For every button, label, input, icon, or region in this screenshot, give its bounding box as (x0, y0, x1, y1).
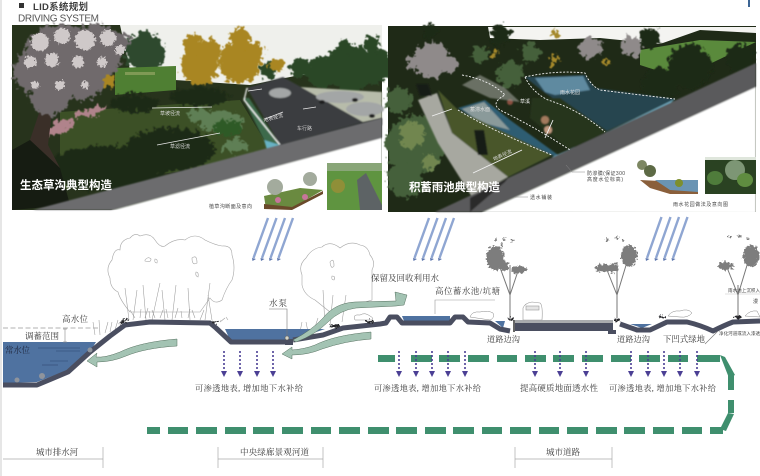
label: water levels: 常水位 (5, 345, 30, 355)
icon: rain garden section thumbnail (637, 160, 698, 194)
panel label: pond: 积蓄雨池典型构造 (409, 180, 500, 194)
label: sunken green: 下凹式绿地 (663, 334, 706, 344)
label: water levels (3, 314, 100, 355)
leader notes: pond: 高度水位标高) (587, 176, 623, 183)
illustration: channel water (225, 329, 325, 340)
leader notes: pond: 雨水花园做法及意向图 (673, 201, 728, 208)
label: permeable surface 2: 可渗透地表, 增加地下水补给 (374, 383, 481, 393)
chart: infiltration arrows (224, 351, 697, 372)
icon: street tree 1 (486, 238, 527, 318)
label: small right-edge notes: 雨水地上沉积入 (728, 287, 760, 294)
label: pump: 水泵 (269, 298, 287, 308)
bracket: urban drainage river (3, 447, 103, 468)
bracket: urban road (515, 447, 612, 468)
label: small right-edge notes: 净化河道或流入漆透 (719, 330, 760, 337)
bracket: central green corridor: 中央绿廊景观河道 (240, 447, 309, 457)
arrow: runoff to channel (282, 332, 371, 359)
leader notes: pond (515, 165, 728, 208)
bracket: urban drainage river: 城市排水河 (36, 447, 79, 457)
illustration: outline trees (108, 234, 374, 312)
illustration: water ripple lines (38, 348, 80, 365)
panel: rain retention pond (385, 24, 756, 213)
icon: street tree 2 (595, 236, 637, 318)
label: permeable surface 3: 可渗透地表, 增加地下水补给 (609, 383, 716, 393)
label: road ditch right: 道路边沟 (617, 334, 650, 344)
leader notes: pond: 透水铺装 (530, 194, 552, 201)
bracket: urban road: 城市道路 (546, 447, 580, 457)
title: DRIVING SYSTEM (18, 14, 99, 24)
panel: ecological grass swale: 地表径流 (263, 112, 284, 124)
caption: swale section: 植草沟断面及意向 (209, 203, 252, 210)
illustration: pond water (402, 316, 450, 321)
label: retention and reuse: 保留及回收利用水 (371, 273, 439, 283)
arrow: pumped water to high pond (293, 292, 407, 342)
panel: rain retention pond: 雨水花园 (560, 89, 580, 96)
label: small right-edge notes: 漫 (753, 298, 758, 305)
illustration: shrubs (354, 310, 760, 320)
icon: rain garden photo (705, 157, 756, 194)
panel: cross section (3, 217, 760, 468)
panel: rain retention pond: 地表径流 (492, 148, 513, 163)
label: pump (269, 298, 287, 336)
panel: ecological grass swale: 车行路 (297, 125, 312, 132)
panel: rain retention pond: 蓄滞水面 (470, 106, 490, 113)
label: road ditch left: 道路边沟 (487, 334, 520, 344)
icon: street tree 3 (718, 234, 759, 316)
illustration: river water (3, 342, 96, 383)
label: water levels: 高水位 (62, 314, 88, 324)
illustration: street trees (486, 234, 759, 318)
illustration: ground profile (3, 317, 760, 385)
chart: green dashed boundary (147, 355, 735, 434)
illustration: reeds (93, 283, 346, 335)
label: high pond: 高位蓄水池/坑塘 (435, 286, 500, 296)
illustration: car (523, 302, 542, 320)
leader notes: pond: 防渗膜(保证300 (587, 170, 625, 177)
panel: rain retention pond: 草溪 (520, 98, 530, 105)
bracket: central green corridor (218, 447, 323, 468)
illustration: ditch water (495, 321, 652, 328)
label: permeable surface 1: 可渗透地表, 增加地下水补给 (195, 383, 303, 393)
arrow: runoff to river (87, 339, 177, 367)
panel label: swale: 生态草沟典型构造 (20, 178, 112, 192)
label: water levels: 调蓄范围 (25, 331, 59, 341)
panel: ecological grass swale: 草滤径流 (170, 143, 190, 150)
title (18, 1, 99, 24)
label: high pond (435, 286, 500, 314)
panel: ecological grass swale (12, 24, 392, 212)
chart: rainfall arrows (254, 217, 688, 258)
icon: swale photo (327, 163, 382, 210)
label: hard surface permeability: 提高硬质地面透水性 (520, 383, 598, 393)
panel: ecological grass swale: 草坡径流 (160, 110, 180, 117)
label: sunken green (663, 331, 718, 344)
icon: swale section thumbnail (264, 172, 323, 210)
label: small right-edge notes (719, 287, 760, 337)
title: LID系统规划 (33, 1, 88, 13)
